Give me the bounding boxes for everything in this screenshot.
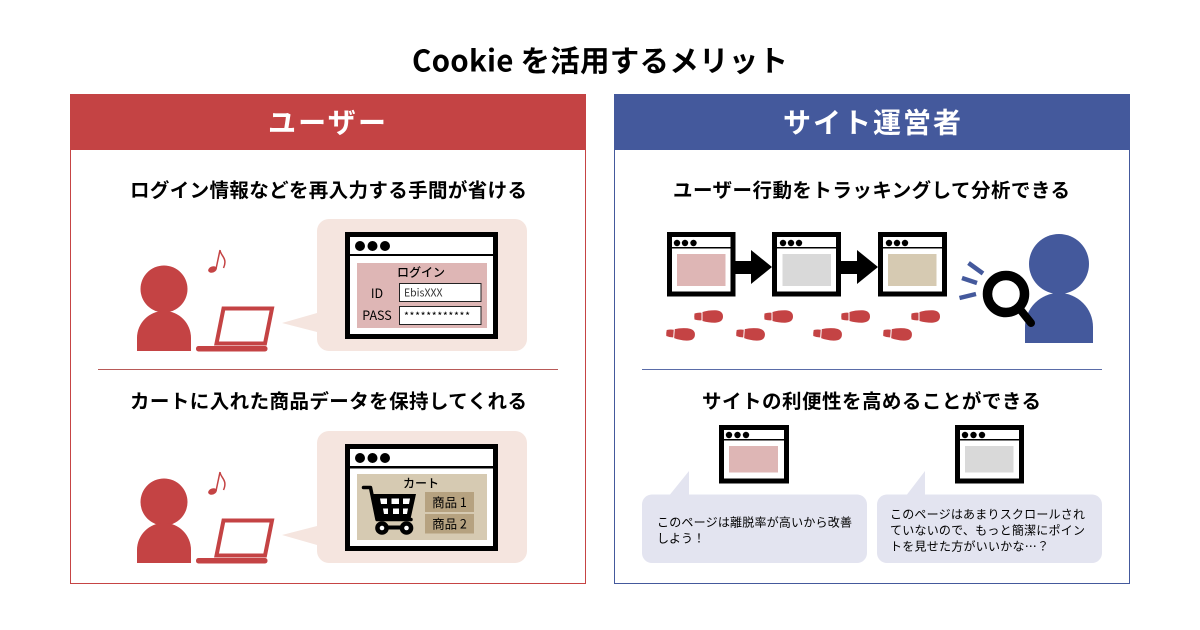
browser: page 3 xyxy=(880,234,944,294)
browser: cart: 商品 2 xyxy=(432,514,467,532)
icon: analyst with magnifier xyxy=(960,234,1093,343)
speech bubble: scroll comment: このページはあまりスクロールされ xyxy=(890,506,1085,522)
speech bubble: login xyxy=(282,219,527,351)
browser: page 2 xyxy=(774,234,838,294)
title: Cookie を活用するメリット xyxy=(412,38,788,80)
heading: tracking: ユーザー行動をトラッキングして分析できる xyxy=(673,174,1070,203)
footprints xyxy=(666,310,940,341)
icon: shopping cart xyxy=(364,488,416,535)
speech bubble: bounce rate comment xyxy=(642,471,867,563)
panel header: user: ユーザー xyxy=(268,102,386,142)
panel header: site operator xyxy=(614,94,1130,150)
speech bubble: bounce rate comment: このページは離脱率が高いから改善 xyxy=(657,514,852,530)
speech bubble: cart xyxy=(282,431,527,563)
heading: usability: サイトの利便性を高めることができる xyxy=(702,385,1041,414)
panel header: user xyxy=(70,94,586,150)
browser: login form: ************ xyxy=(404,309,470,324)
arrow 2 xyxy=(841,250,878,284)
browser: feedback page 1 xyxy=(722,428,786,481)
browser: login form: PASS xyxy=(362,305,392,324)
heading: cart: カートに入れた商品データを保持してくれる xyxy=(130,385,527,414)
speech bubble: scroll comment: ていないので、もっと簡潔にポイン xyxy=(890,522,1085,538)
icon: happy user with laptop 1 xyxy=(137,250,272,352)
browser: login form: EbisXXX xyxy=(404,286,443,300)
browser: feedback page 2 xyxy=(958,428,1022,481)
speech bubble: scroll comment xyxy=(877,471,1102,563)
panel header: site operator: サイト運営者 xyxy=(783,102,961,142)
browser: login form: ログイン xyxy=(397,264,445,280)
browser: page 1 xyxy=(670,234,733,294)
arrow 1 xyxy=(735,250,772,284)
heading: login: ログイン情報などを再入力する手間が省ける xyxy=(130,174,527,203)
speech bubble: bounce rate comment: しよう！ xyxy=(657,530,705,546)
panel: user xyxy=(70,94,586,584)
icon: happy user with laptop 2 xyxy=(137,472,272,564)
browser: cart: 商品 1 xyxy=(432,492,467,511)
browser: login form: ID xyxy=(371,283,383,302)
browser: cart xyxy=(348,446,496,548)
panel: site operator xyxy=(614,94,1130,584)
speech bubble: scroll comment: トを見せた方がいいかな…？ xyxy=(890,538,1049,554)
browser: login form xyxy=(348,234,496,336)
browser: cart: カート xyxy=(403,474,439,492)
